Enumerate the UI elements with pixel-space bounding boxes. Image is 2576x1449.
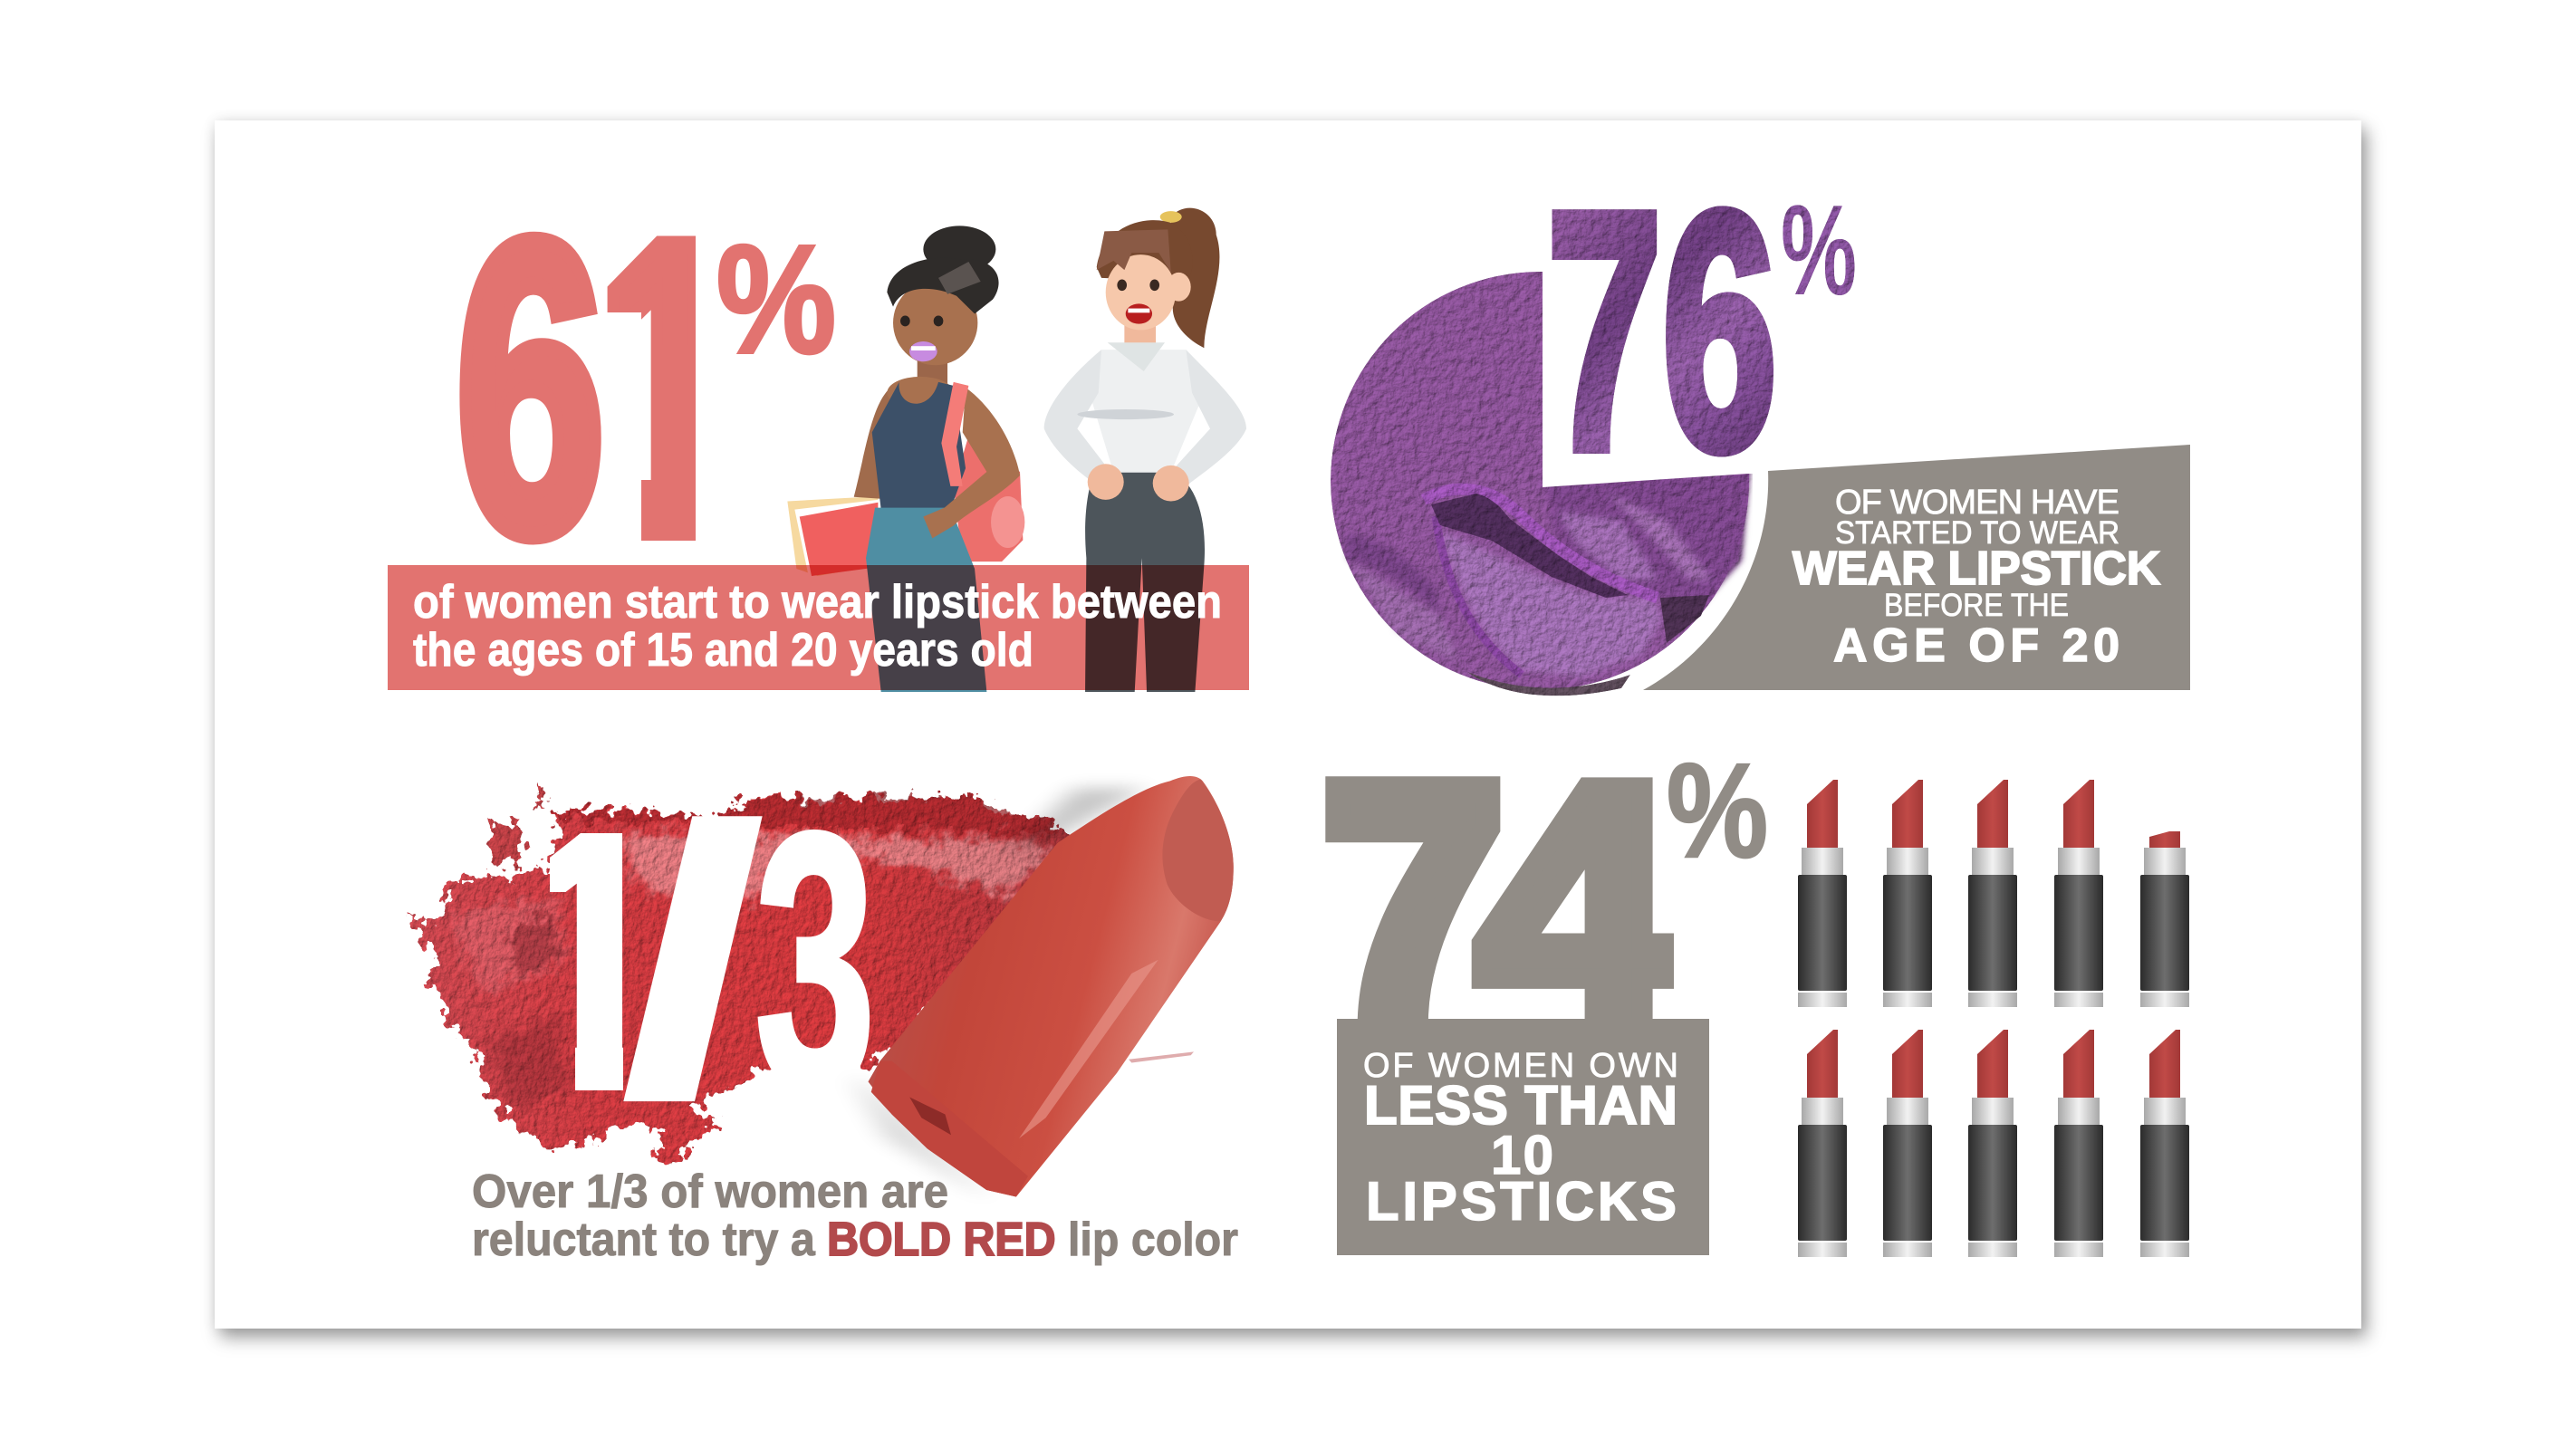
number 74: 7 (1324, 715, 1502, 1101)
number 74: 4 (1476, 712, 1680, 1102)
big number 61: 1 (595, 156, 742, 620)
illustration: two women (787, 208, 1246, 692)
woman with backpack and books (787, 226, 1024, 692)
gray caption box (1337, 1019, 1709, 1255)
red lipstick smear (407, 784, 1073, 1164)
lipstick pictogram row 1 (1798, 780, 2189, 1007)
caption text: STARTED TO WEAR (1835, 515, 2119, 551)
gray caption shape (1643, 445, 2190, 690)
number 1/3: 3 (755, 756, 876, 1166)
caption text (1363, 1047, 1678, 1232)
purple lipstick pie chart (1331, 272, 1753, 696)
caption text (472, 1166, 1238, 1266)
red lipstick bullet (851, 776, 1234, 1200)
caption text: OF WOMEN OWN (1363, 1047, 1678, 1085)
panel: 76 percent before age of 20 (1331, 142, 2190, 696)
percent sign: % (1667, 736, 1768, 886)
number 1/3: 1 (509, 756, 676, 1166)
number 1/3 (550, 816, 870, 1101)
number 74 (1325, 776, 1674, 1019)
caption text: OF WOMEN HAVE (1835, 484, 2119, 522)
caption text: BEFORE THE (1884, 588, 2069, 623)
big number 61 (459, 232, 696, 545)
panel: one third reluctant to try bold red (407, 756, 1238, 1266)
caption bar (388, 565, 1249, 690)
caption text: 10 (1491, 1125, 1553, 1185)
infographic artwork (388, 205, 2190, 1266)
percent sign: % (1781, 178, 1857, 322)
caption text (413, 576, 1222, 677)
number 76: 76 (1547, 142, 1777, 519)
panel: 61 percent start between 15 and 20 (388, 156, 1249, 692)
caption text: Over 1/3 of women are (472, 1166, 948, 1218)
caption text: LIPSTICKS (1366, 1171, 1677, 1232)
caption text: LESS THAN (1364, 1075, 1677, 1136)
caption text: reluctant to try a BOLD RED lip color (472, 1214, 1238, 1266)
woman in white shirt (1044, 208, 1246, 692)
caption text (1793, 484, 2160, 672)
white card panel (215, 120, 2361, 1329)
caption text: of women start to wear lipstick between (413, 576, 1222, 629)
caption text: the ages of 15 and 20 years old (413, 624, 1033, 677)
panel: 74 percent own fewer than 10 (1324, 712, 2189, 1257)
percent sign: % (716, 214, 836, 386)
caption text: AGE OF 20 (1833, 619, 2119, 672)
caption text: WEAR LIPSTICK (1793, 542, 2160, 595)
lipstick pictogram row 2 (1798, 1030, 2189, 1257)
number 1/3: / (629, 756, 759, 1166)
big number 61: 6 (456, 156, 605, 620)
lipstick folds (1345, 466, 1753, 696)
